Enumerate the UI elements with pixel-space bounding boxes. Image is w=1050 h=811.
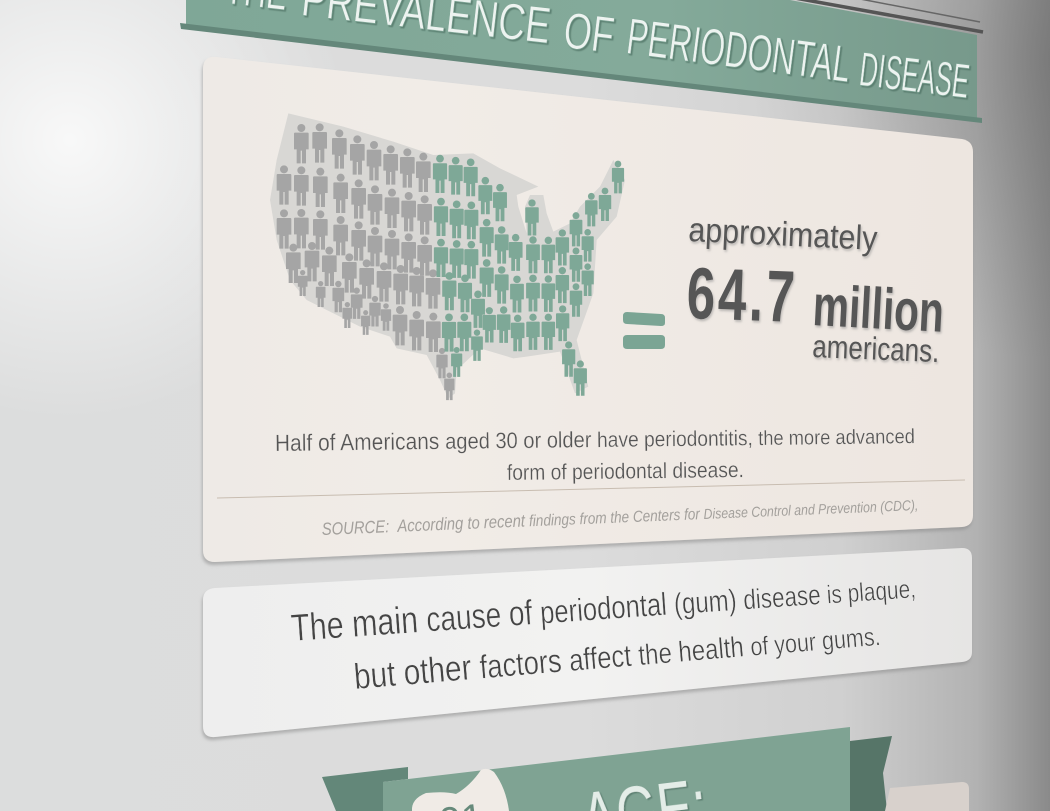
banner body	[186, 0, 977, 120]
ribbon left tail	[322, 767, 408, 811]
tooth icon	[412, 769, 509, 811]
heading banner	[180, 0, 983, 123]
equals sign	[623, 312, 665, 349]
statistic text: approximately	[688, 211, 878, 258]
statement text: The main cause of periodontal (gum) disease is plaque,	[290, 564, 917, 650]
card background	[203, 548, 972, 737]
next card corner	[885, 782, 969, 811]
US map of people	[270, 113, 625, 400]
green people	[433, 155, 624, 396]
card background	[203, 57, 973, 562]
panel: prevalence statistics	[203, 57, 973, 562]
description text: form of periodontal disease.	[507, 457, 744, 485]
statement text: but other factors affect the health of your gums.	[352, 612, 882, 697]
banner ledge	[180, 23, 982, 123]
statistic text	[685, 211, 946, 369]
statistic text: million	[811, 273, 946, 345]
statistic text: 64.7	[685, 253, 799, 338]
gray people	[277, 123, 454, 400]
panel: main cause statement	[203, 548, 972, 737]
map silhouette	[270, 113, 625, 398]
description text: Half of Americans aged 30 or older have periodontitis, the more advanced	[275, 422, 915, 456]
title: OF	[561, 1, 617, 64]
ribbon right tail	[850, 736, 892, 811]
title	[223, 0, 972, 109]
description text	[275, 422, 915, 485]
source note: SOURCE: According to recent findings from the Centers for Disease Control and Prevention (CDC),	[321, 494, 919, 539]
banner top rails	[795, 0, 983, 32]
ribbon body	[383, 727, 850, 811]
statistic text: americans.	[812, 328, 940, 369]
divider	[217, 480, 965, 498]
title: PERIODONTAL	[624, 7, 854, 93]
statement text	[290, 564, 917, 697]
section ribbon: age	[322, 727, 969, 811]
